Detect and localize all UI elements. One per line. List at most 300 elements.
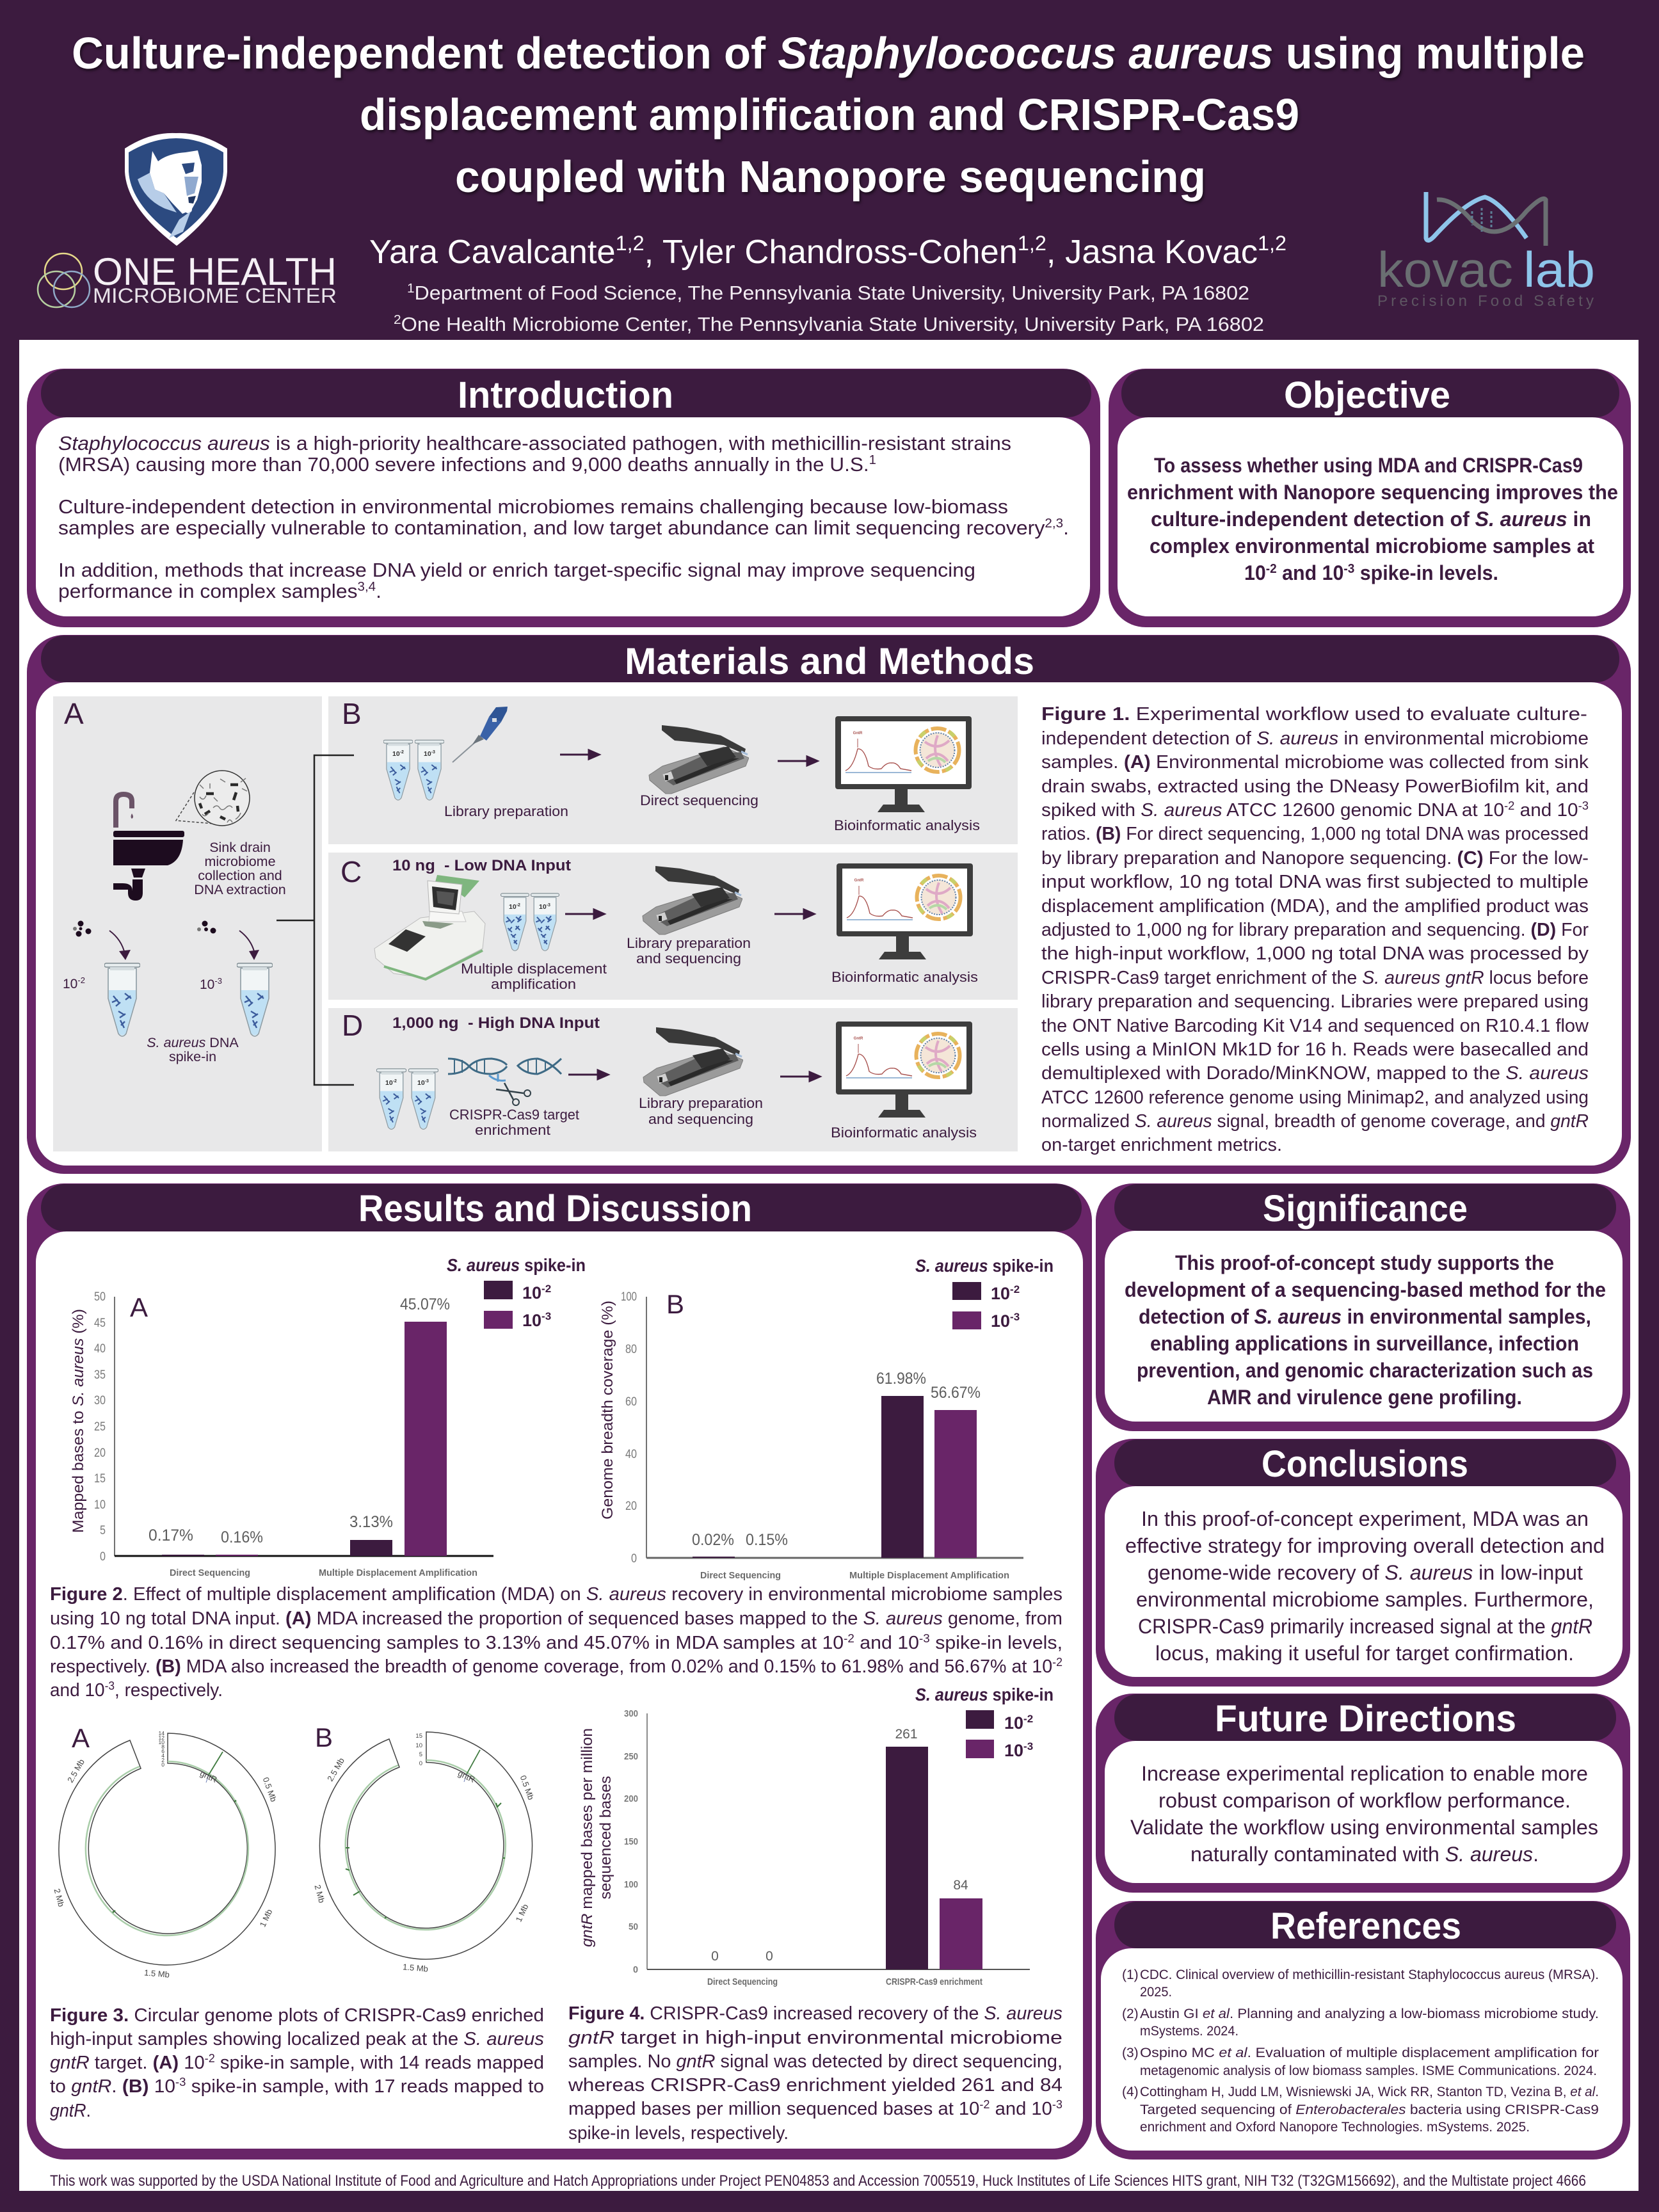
text block: introduction body: Culture-independent detection in environmental microbiomes remains challenging because low-biomass — [58, 495, 1008, 518]
label: sink drain: DNA extraction — [194, 882, 286, 897]
authors: 1,2 — [616, 232, 645, 255]
bar chart: Figure 2A mapped bases: 30 — [94, 1394, 106, 1407]
chart: Figure 3A circular genome plot — [52, 1723, 278, 1980]
label: library preparation and sequencing: and sequencing — [636, 950, 741, 966]
label: bioinformatic analysis: Bioinformatic analysis — [831, 1125, 977, 1141]
logo: Kovac Lab: lab — [1523, 241, 1595, 298]
bar chart: Figure 2A mapped bases: Multiple Displacement Amplification — [319, 1567, 477, 1578]
bar chart: Figure 4 gntR mapped bases: 10 — [1004, 1713, 1023, 1733]
chart: Figure 3B circular genome plot: 0.5 Mb — [518, 1774, 536, 1801]
text block: Figure 4 caption: and 10 — [990, 2099, 1052, 2119]
bar chart: Figure 2A mapped bases: -3 — [541, 1310, 551, 1322]
text block: conclusions: In this proof-of-concept experiment, MDA was an — [1141, 1507, 1589, 1530]
chart: Figure 3A circular genome plot: gntR — [198, 1768, 218, 1784]
bar chart: Figure 2A mapped bases: -2 — [541, 1283, 551, 1295]
heading: Materials and Methods: Materials and Methods — [625, 641, 1034, 682]
bar chart: Figure 4 gntR mapped bases: -2 — [1023, 1713, 1033, 1725]
heading: high input: 1,000 ng - High DNA Input — [392, 1014, 600, 1032]
text block: introduction body: 1 — [869, 453, 876, 467]
bar chart: Figure 4 gntR mapped bases: Direct Sequencing — [707, 1976, 778, 1987]
bar chart: Figure 2A mapped bases: 10 — [522, 1283, 541, 1302]
workflow panel C: low DNA input: C — [341, 855, 362, 888]
text block: reference list: 2025. — [1140, 1985, 1172, 2000]
text block: reference list: Cottingham H, Judd LM, Wisniewski JA, Wick RR, Stanton TD, Vezina B, et al. — [1140, 2085, 1599, 2099]
text block: conclusions: genome-wide recovery of S. aureus in low-input — [1148, 1561, 1583, 1584]
bar chart: Figure 2B genome breadth: 100 — [621, 1290, 637, 1304]
chart: Figure 3B circular genome plot: 1 Mb — [514, 1903, 530, 1923]
text block: reference list — [1122, 1968, 1599, 2135]
text block: Figure 1 caption: drain swabs, extracted using the DNeasy PowerBiofilm kit, and — [1041, 776, 1589, 797]
label: library preparation and sequencing: Library preparation — [639, 1095, 763, 1111]
heading: low input: 10 ng - Low DNA Input — [392, 857, 571, 874]
chart: Figure 3A circular genome plot: 14 — [159, 1730, 164, 1736]
chart: Figure 3A circular genome plot: A — [72, 1723, 90, 1753]
text block: reference list: (3) — [1122, 2046, 1139, 2060]
affiliations — [394, 282, 1264, 335]
icon: tubes: -2 — [517, 903, 520, 908]
text block: Figure 2 caption: -3 — [105, 1679, 115, 1692]
icon: DNA helix and scissors — [448, 1059, 561, 1105]
affiliations: 1 — [407, 282, 415, 296]
bar chart: Figure 2A mapped bases: 25 — [94, 1420, 106, 1434]
arrow — [565, 910, 604, 918]
text block: Figure 4 caption: whereas CRISPR-Cas9 enrichment yielded 261 and 84 — [568, 2075, 1062, 2096]
bar chart: Figure 4 gntR mapped bases: 261 — [895, 1727, 918, 1742]
bar chart: Figure 4 gntR mapped bases — [579, 1685, 1054, 1987]
chart: Figure 3A circular genome plot: 2 Mb — [52, 1887, 66, 1908]
text block: significance statement: detection of S. aureus in environmental samples, — [1139, 1305, 1591, 1328]
bar chart: Figure 2A mapped bases: A — [130, 1292, 148, 1322]
text block: Figure 1 caption: ATCC 12600 reference genome using Minimap2, and analyzed using — [1041, 1087, 1589, 1108]
affiliations: One Health Microbiome Center, The Pennsylvania State University, University Park, PA 16802 — [401, 313, 1264, 335]
bar chart: Figure 2A mapped bases: 35 — [94, 1368, 106, 1382]
bar chart: Figure 2B genome breadth: Direct Sequencing — [700, 1570, 781, 1581]
label: sink drain: microbiome — [204, 854, 276, 869]
icon: tubes — [383, 740, 444, 800]
chart: Figure 3A circular genome plot: 2 — [161, 1757, 164, 1763]
chart: Figure 3A circular genome plot: 1.5 Mb — [144, 1968, 170, 1980]
text block: Figure 2 caption: and 10 — [854, 1633, 919, 1653]
label: library preparation: Library preparation — [444, 803, 568, 819]
label: MDA: Multiple displacement — [461, 961, 607, 977]
bar chart: Figure 4 gntR mapped bases: sequenced bases — [597, 1775, 614, 1900]
bar chart: Figure 2A mapped bases: 50 — [94, 1290, 106, 1304]
bar chart: Figure 2A mapped bases: 10 — [522, 1311, 541, 1330]
bar chart: Figure 4 gntR mapped bases: 84 — [953, 1878, 968, 1893]
text block: Figure 1 caption: input workflow, 10 ng total DNA was first subjected to multiple — [1041, 872, 1589, 892]
icon: MinION sequencer — [643, 866, 742, 934]
text block: Figure 2 caption — [50, 1584, 1062, 1701]
icon: spike-in tubes: 10 — [63, 977, 77, 991]
icon: tubes: 10 — [509, 903, 517, 911]
text block: Figure 4 caption: spike-in levels, respectively. — [568, 2123, 789, 2144]
icon: tubes — [376, 1069, 438, 1129]
panel: Materials and Methods — [27, 635, 1631, 1174]
icon: DNA dots and arrows — [73, 920, 259, 960]
text block: future directions: Validate the workflow using environmental samples — [1130, 1816, 1598, 1839]
text block: introduction body: samples are especially vulnerable to contamination, and low target abundance can limit sequencing recovery — [58, 517, 1013, 539]
text block: objective statement: -3 — [1343, 562, 1354, 576]
label: library preparation and sequencing: Library preparation — [627, 935, 751, 951]
affiliations: 2 — [394, 313, 401, 327]
icon: MinION sequencer — [643, 1027, 743, 1096]
heading: Objective: Objective — [1284, 374, 1450, 416]
text block: Figure 2 caption: -3 — [919, 1632, 930, 1645]
text block: objective statement — [1127, 454, 1618, 584]
logo: Kovac Lab: Precision Food Safety — [1377, 293, 1594, 310]
text block: reference list: (1) — [1122, 1968, 1139, 1982]
bar chart: Figure 2B genome breadth: Genome breadth coverage (%) — [599, 1301, 616, 1519]
title: Culture-independent detection of Staphylococcus aureus using multiple — [72, 28, 1585, 78]
bar chart: Figure 4 gntR mapped bases: -3 — [1023, 1740, 1033, 1752]
text block: reference list: CDC. Clinical overview of methicillin-resistant Staphylococcus aureus (MRSA). — [1140, 1968, 1599, 1982]
chart: Figure 3B circular genome plot: 2 Mb — [312, 1884, 326, 1904]
text block: Figure 4 caption — [568, 2003, 1062, 2144]
text block: objective statement: culture-independent detection of S. aureus in — [1151, 508, 1591, 531]
workflow panel C: low DNA input — [328, 853, 1018, 1000]
chart: Figure 3B circular genome plot: 10 — [415, 1742, 422, 1749]
label: sink drain: collection and — [198, 868, 282, 883]
bar chart: Figure 2B genome breadth: 80 — [625, 1343, 637, 1356]
bar chart: Figure 4 gntR mapped bases: 10 — [1004, 1741, 1023, 1760]
bar chart: Figure 2A mapped bases: 40 — [94, 1342, 106, 1356]
workflow connector — [276, 755, 354, 1085]
bar chart: Figure 2A mapped bases — [70, 1255, 586, 1578]
chart: Figure 3B circular genome plot — [312, 1722, 536, 1974]
chart: Figure 3A circular genome plot: 1 Mb — [258, 1908, 274, 1928]
panel: Future Directions — [1096, 1694, 1630, 1893]
icon: magnified microbes — [176, 771, 250, 826]
workflow panel A: sample collection — [53, 696, 322, 1151]
text block: Figure 2 caption: and 10 — [50, 1680, 107, 1701]
text block: Figure 1 caption: the high-input workflow, 1,000 ng total DNA was processed by — [1041, 943, 1589, 964]
text block: Figure 4 caption: -2 — [979, 2098, 990, 2111]
bar chart: Figure 2A mapped bases: 45.07% — [400, 1295, 450, 1313]
text block: future directions: robust comparison of workflow performance. — [1158, 1789, 1571, 1812]
icon: tubes: 10 — [424, 750, 431, 758]
icon: tubes: -3 — [431, 750, 435, 755]
label: library preparation and sequencing — [627, 935, 751, 966]
label: bioinformatic analysis: Bioinformatic analysis — [834, 817, 980, 833]
bar chart: Figure 4 gntR mapped bases: 0 — [633, 1964, 638, 1975]
bar chart: Figure 2A mapped bases: Mapped bases to S. aureus (%) — [70, 1309, 87, 1533]
title: coupled with Nanopore sequencing — [455, 152, 1206, 202]
text block: Figure 2 caption: -2 — [844, 1632, 854, 1645]
chart: Figure 3A circular genome plot: 4 — [161, 1752, 164, 1759]
chart: Figure 3B circular genome plot: gntR — [456, 1768, 476, 1784]
icon: sink — [113, 792, 184, 901]
text block: Figure 1 caption: Figure 1. Experimental workflow used to evaluate culture- — [1041, 704, 1587, 725]
bar chart: Figure 4 gntR mapped bases: 150 — [624, 1836, 638, 1847]
bar chart: Figure 2B genome breadth: -3 — [1010, 1311, 1020, 1323]
logo: One Health Microbiome Center: MICROBIOME CENTER — [93, 284, 337, 307]
text block: Figure 3 caption: -3 — [175, 2076, 186, 2088]
text block: reference list: (4) — [1122, 2085, 1139, 2099]
logo: One Health Microbiome Center — [38, 250, 337, 307]
bar chart: Figure 2A mapped bases: 0.16% — [221, 1528, 263, 1546]
icon: tubes: 10 — [539, 903, 547, 911]
text block: future directions: Increase experimental replication to enable more — [1141, 1762, 1588, 1785]
bar chart: Figure 4 gntR mapped bases: 100 — [624, 1879, 638, 1890]
heading: Significance: Significance — [1263, 1188, 1468, 1230]
bar chart: Figure 2B genome breadth: 10 — [991, 1311, 1010, 1331]
title: displacement amplification and CRISPR-Cas9 — [360, 90, 1299, 140]
text block: introduction body: performance in complex samples — [58, 580, 349, 602]
bar chart: Figure 4 gntR mapped bases: 50 — [629, 1921, 638, 1932]
bar chart: Figure 4 gntR mapped bases: CRISPR-Cas9 enrichment — [886, 1976, 982, 1987]
chart: Figure 3A circular genome plot: 2.5 Mb — [65, 1758, 86, 1784]
label: sink drain — [194, 840, 286, 897]
arrow — [778, 757, 817, 765]
text block: Figure 2 caption: respectively. (B) MDA also increased the breadth of genome coverage, from 0.02% and 0.15% to 61.98% and 56.67% at 10 — [50, 1656, 1063, 1677]
bar chart: Figure 2A mapped bases: Direct Sequencing — [170, 1567, 250, 1578]
text block: conclusions: CRISPR-Cas9 primarily increased signal at the gntR — [1138, 1615, 1592, 1638]
bar chart: Figure 2B genome breadth: 20 — [625, 1500, 637, 1513]
icon: tubes: 10 — [392, 750, 400, 758]
bar chart: Figure 2B genome breadth: Multiple Displacement Amplification — [849, 1570, 1009, 1581]
text block: Figure 2 caption: -2 — [1052, 1656, 1062, 1669]
text block: reference list: (2) — [1122, 2007, 1139, 2021]
chart: Figure 3B circular genome plot: 2.5 Mb — [325, 1756, 346, 1783]
chart: Figure 3B circular genome plot: 5 — [419, 1751, 422, 1758]
text block: objective statement: enrichment with Nanopore sequencing improves the — [1127, 481, 1618, 504]
icon: tubes: -3 — [547, 903, 550, 908]
arrow — [774, 910, 814, 918]
bar chart: Figure 2B genome breadth: 10 — [991, 1284, 1010, 1303]
label: spike-in: spike-in — [169, 1049, 216, 1064]
panel: Results and Discussion — [27, 1183, 1092, 2160]
heading: Introduction: Introduction — [458, 374, 673, 416]
workflow panel B: direct sequencing: B — [342, 697, 362, 730]
icon: spike-in tubes: -3 — [214, 976, 222, 986]
text block: conclusions: locus, making it useful for target confirmation. — [1155, 1642, 1574, 1665]
text block: significance statement: AMR and virulence gene profiling. — [1207, 1386, 1522, 1409]
text block: reference list: mSystems. 2024. — [1140, 2024, 1238, 2039]
text block: introduction body: (MRSA) causing more than 70,000 severe infections and 9,000 deaths annually in the U.S. — [58, 453, 854, 476]
text block: Figure 3 caption: high-input samples showing localized peak at the S. aureus — [50, 2029, 544, 2049]
label: library preparation and sequencing — [639, 1095, 763, 1127]
bar chart: Figure 4 gntR mapped bases: S. aureus spike-in — [915, 1685, 1054, 1704]
text block: Figure 3 caption: -2 — [205, 2052, 215, 2065]
arrow — [568, 1070, 608, 1079]
bar chart: Figure 2B genome breadth: 0.15% — [746, 1531, 788, 1549]
text block: reference list: Ospino MC et al. Evaluation of multiple displacement amplification for — [1140, 2046, 1599, 2060]
workflow panel B: direct sequencing — [328, 696, 1018, 844]
text block: Figure 3 caption: spike-in sample, with 14 reads mapped — [215, 2053, 544, 2073]
icon: tubes: -2 — [393, 1079, 397, 1084]
icon: tubes: 10 — [385, 1079, 393, 1087]
chart: Figure 3A circular genome plot: 6 — [161, 1748, 164, 1754]
icon: tubes: -3 — [425, 1079, 429, 1084]
panel: Introduction — [27, 369, 1100, 627]
icon: spike-in tubes — [63, 963, 273, 1036]
logo: Kovac Lab — [1377, 192, 1595, 310]
text block: significance statement: development of a sequencing-based method for the — [1125, 1278, 1606, 1301]
panel: Conclusions — [1096, 1439, 1630, 1687]
text block: Figure 1 caption: samples. (A) Environmental microbiome was collected from sink — [1041, 752, 1589, 773]
text block: Figure 1 caption: cells using a MinION Mk1D for 16 h. Reads were basecalled and — [1041, 1039, 1589, 1060]
text block: Figure 2 caption: 0.17% and 0.16% in direct sequencing samples to 3.13% and 45.07% in MDA samples at 10 — [50, 1633, 810, 1653]
icon: thermocycler — [374, 875, 485, 979]
text block: future directions — [1130, 1762, 1598, 1866]
text block: Figure 3 caption: Figure 3. Circular genome plots of CRISPR-Cas9 enriched — [50, 2005, 544, 2026]
bar chart: Figure 4 gntR mapped bases: 0 — [765, 1949, 773, 1964]
chart: Figure 3A circular genome plot: 0 — [161, 1761, 164, 1768]
text block: objective statement: -2 — [1266, 562, 1277, 576]
text block: introduction body: . — [376, 580, 381, 602]
text block: conclusions — [1125, 1507, 1605, 1665]
bar chart: Figure 2B genome breadth: 60 — [625, 1395, 637, 1409]
chart: Figure 3A circular genome plot: 0.5 Mb — [261, 1776, 278, 1803]
bar chart: Figure 2B genome breadth: -2 — [1010, 1283, 1020, 1295]
logo: One Health Microbiome Center: ONE HEALTH — [93, 250, 337, 293]
label: MDA: amplification — [491, 976, 576, 992]
text block: Figure 3 caption: spike-in sample, with 17 reads mapped to — [186, 2076, 544, 2097]
panel: Significance — [1096, 1183, 1630, 1431]
text block: Figure 1 caption: demultiplexed with Dorado/MinKNOW, mapped to the S. aureus — [1041, 1063, 1589, 1084]
authors: , Tyler Chandross-Cohen — [645, 234, 1018, 271]
heading: Results and Discussion: Results and Discussion — [358, 1188, 752, 1230]
text block: Figure 1 caption: the ONT Native Barcoding Kit V14 and sequenced on R10.4.1 flow — [1041, 1016, 1589, 1036]
chart: Figure 3B circular genome plot: 0 — [419, 1760, 422, 1767]
text block: Figure 2 caption: Figure 2. Effect of multiple displacement amplification (MDA) on S. aureus recovery in environmental microbiome samples — [50, 1584, 1062, 1605]
text block: Figure 3 caption: gntR. — [50, 2101, 91, 2121]
text block: reference list: enrichment and Oxford Nanopore Technologies. mSystems. 2025. — [1140, 2120, 1530, 2135]
icon: tubes: -2 — [400, 750, 404, 755]
chart: Figure 3A circular genome plot: 10 — [159, 1739, 164, 1745]
text block: significance statement: enabling applications in surveillance, infection — [1150, 1332, 1579, 1355]
icon: tubes: 10 — [417, 1079, 425, 1087]
chart: Figure 3B circular genome plot: B — [315, 1722, 333, 1752]
text block: Figure 4 caption: samples. No gntR signal was detected by direct sequencing, — [568, 2051, 1062, 2072]
text block: Figure 3 caption: gntR target. (A) 10 — [50, 2053, 204, 2073]
bar chart: Figure 4 gntR mapped bases: 200 — [624, 1793, 638, 1804]
text block: Figure 2 caption: spike-in levels, — [930, 1633, 1062, 1653]
icon: spike-in tubes: -2 — [77, 975, 85, 985]
panel: References — [1096, 1901, 1630, 2160]
label: CRISPR enrichment: CRISPR-Cas9 target — [449, 1107, 579, 1123]
text block: Figure 1 caption: normalized S. aureus signal, breadth of genome coverage, and gntR — [1041, 1111, 1589, 1132]
text block: Figure 1 caption: -3 — [1578, 799, 1589, 812]
bar chart: Figure 4 gntR mapped bases: 250 — [624, 1751, 638, 1762]
label: sink drain: Sink drain — [209, 840, 271, 855]
authors: , Jasna Kovac — [1046, 234, 1258, 271]
icon: MinION sequencer — [649, 725, 749, 794]
text block: Figure 4 caption: mapped bases per million sequenced bases at 10 — [568, 2099, 977, 2119]
bar chart: Figure 2A mapped bases: 0 — [100, 1550, 106, 1564]
text block: Figure 1 caption: displacement amplification (MDA), and the amplified product was — [1041, 896, 1589, 917]
bar chart: Figure 2A mapped bases: 10 — [94, 1498, 106, 1512]
text block: reference list: metagenomic analysis of low biomass samples. ISME Communications. 2024. — [1140, 2064, 1597, 2078]
label: spike-in — [147, 1035, 239, 1064]
text block: Figure 4 caption: Figure 4. CRISPR-Cas9 increased recovery of the S. aureus — [568, 2003, 1062, 2024]
text block: introduction body: In addition, methods that increase DNA yield or enrich target-specific signal may improve sequencing — [58, 559, 975, 581]
text block: objective statement: complex environmental microbiome samples at — [1150, 534, 1594, 557]
text block: Figure 4 caption: gntR target in high-input environmental microbiome — [568, 2028, 1062, 2048]
text block: future directions: naturally contaminated with S. aureus. — [1190, 1843, 1539, 1866]
chart: Figure 3B circular genome plot: 1.5 Mb — [403, 1962, 428, 1974]
bar chart: Figure 2B genome breadth: 61.98% — [876, 1370, 926, 1388]
text block: Figure 1 caption: by library preparation and Nanopore sequencing. (C) For the low- — [1041, 848, 1589, 869]
title — [72, 28, 1585, 202]
heading: Future Directions: Future Directions — [1215, 1698, 1516, 1740]
authors: Yara Cavalcante — [369, 234, 613, 271]
chart: Figure 3A circular genome plot: 8 — [161, 1743, 164, 1750]
text block: introduction body: . — [1063, 517, 1069, 539]
logo: Kovac Lab: kovac — [1377, 241, 1513, 298]
icon: tubes — [501, 894, 559, 950]
bar chart: Figure 2B genome breadth: 0 — [631, 1552, 637, 1566]
bar chart: Figure 2B genome breadth: 40 — [625, 1448, 637, 1461]
text block: Figure 1 caption: CRISPR-Cas9 target enrichment of the S. aureus gntR locus before — [1041, 968, 1589, 988]
text block: objective statement: 10 — [1244, 561, 1267, 584]
icon: spike-in tubes: 10 — [200, 977, 214, 992]
bar chart: Figure 2A mapped bases: 5 — [100, 1524, 106, 1537]
text block: Figure 1 caption — [1041, 704, 1589, 1155]
text block: conclusions: effective strategy for improving overall detection and — [1125, 1534, 1605, 1557]
bar chart: Figure 2A mapped bases: S. aureus spike-in — [447, 1255, 586, 1275]
workflow panel D: high DNA input — [328, 1008, 1018, 1151]
chart: Figure 3B circular genome plot: 15 — [415, 1733, 422, 1740]
text block: reference list: Austin GI et al. Planning and analyzing a low-biomass microbiome study. — [1140, 2007, 1599, 2021]
workflow panel A: sample collection: A — [64, 697, 84, 730]
icon: pipette — [453, 707, 508, 762]
arrow — [780, 1072, 820, 1081]
heading: References: References — [1270, 1905, 1461, 1947]
text block: conclusions: environmental microbiome samples. Furthermore, — [1136, 1588, 1594, 1611]
label: CRISPR enrichment — [449, 1107, 579, 1138]
authors: 1,2 — [1018, 232, 1046, 255]
bar chart: Figure 4 gntR mapped bases: gntR mapped bases per million — [579, 1728, 596, 1947]
bar chart: Figure 2B genome breadth: B — [666, 1289, 684, 1319]
text block: Figure 2 caption: using 10 ng total DNA input. (A) MDA increased the proportion of sequenced bases mapped to the S. aureus genome, from — [50, 1608, 1062, 1629]
text block: Figure 1 caption: on-target enrichment metrics. — [1041, 1135, 1282, 1155]
text block: significance statement: prevention, and genomic characterization such as — [1137, 1359, 1593, 1382]
text block: Figure 3 caption: to gntR. (B) 10 — [50, 2076, 175, 2097]
arrow — [560, 750, 599, 759]
text block: introduction body: Staphylococcus aureus is a high-priority healthcare-associated pathogen, with methicillin-resistant strains — [58, 432, 1011, 454]
logo: Penn State shield — [125, 133, 227, 246]
text block: Figure 1 caption: ratios. (B) For direct sequencing, 1,000 ng total DNA was processed — [1041, 824, 1589, 844]
text block: objective statement: To assess whether using MDA and CRISPR-Cas9 — [1154, 454, 1583, 477]
chart: Figure 3A circular genome plot: 12 — [159, 1735, 164, 1741]
icon: monitor — [837, 863, 973, 959]
bar chart: Figure 4 gntR mapped bases: 300 — [624, 1708, 638, 1719]
label: bioinformatic analysis: Bioinformatic analysis — [831, 969, 978, 985]
text block: significance statement — [1125, 1251, 1606, 1409]
heading: Conclusions: Conclusions — [1262, 1443, 1468, 1485]
text block: introduction body — [58, 432, 1069, 602]
text block: introduction body: 3,4 — [358, 580, 376, 594]
workflow panel D: high DNA input: D — [342, 1009, 363, 1042]
text block: significance statement: This proof-of-concept study supports the — [1175, 1251, 1554, 1274]
text block: Figure 3 caption — [50, 2005, 544, 2121]
authors: 1,2 — [1258, 232, 1286, 255]
affiliations: Department of Food Science, The Pennsylvania State University, University Park, PA 16802 — [415, 282, 1249, 304]
label: CRISPR enrichment: enrichment — [475, 1122, 550, 1138]
text block: Figure 1 caption: -2 — [1504, 799, 1514, 812]
icon: monitor — [836, 1022, 972, 1118]
bar chart: Figure 2B genome breadth: 56.67% — [931, 1384, 981, 1402]
text block: Figure 4 caption: -3 — [1052, 2098, 1062, 2111]
text block: Figure 1 caption: independent detection of S. aureus in environmental microbiome — [1041, 728, 1589, 749]
bar chart: Figure 2B genome breadth: S. aureus spike-in — [915, 1256, 1054, 1276]
text block: introduction body: 2,3 — [1045, 517, 1063, 531]
bar chart: Figure 2A mapped bases: 0.17% — [148, 1527, 193, 1544]
label: MDA — [461, 961, 607, 992]
icon: monitor — [835, 716, 972, 812]
bar chart: Figure 2A mapped bases: 3.13% — [349, 1513, 393, 1531]
